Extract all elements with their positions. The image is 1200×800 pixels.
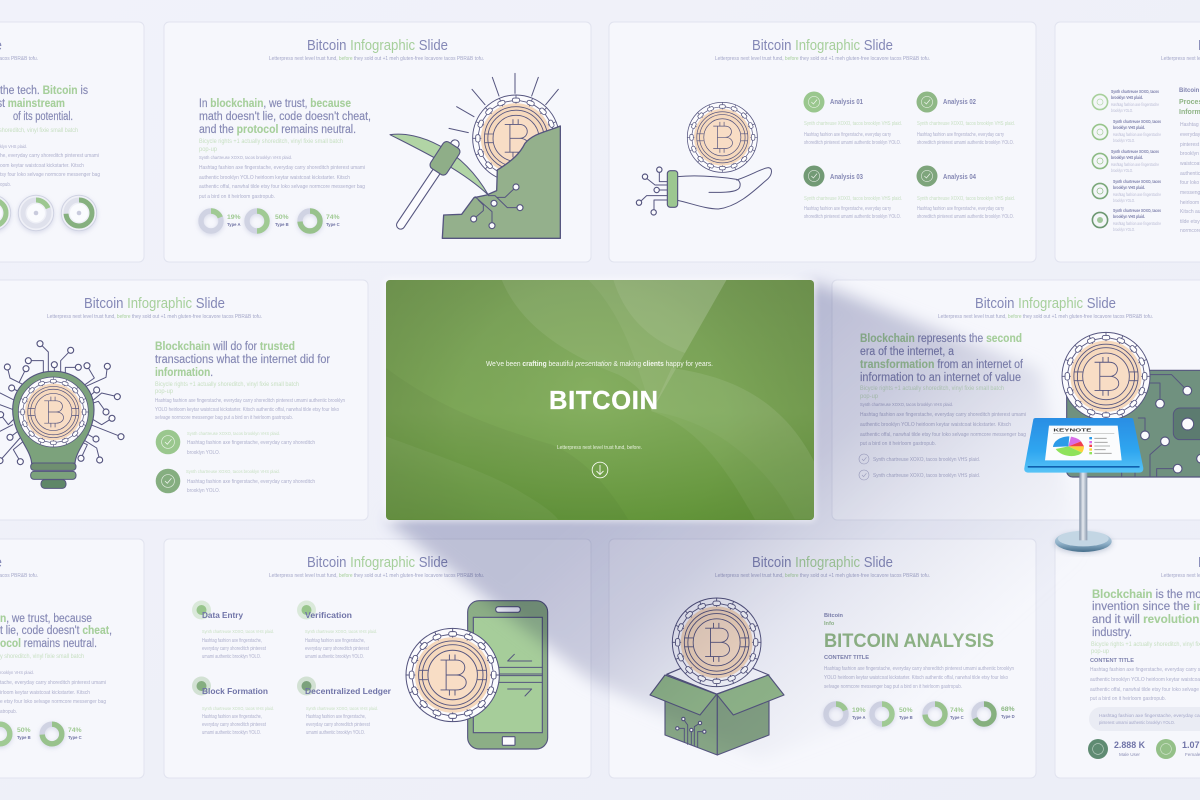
item: Verification: umami authentic brooklyn YOLO.: [305, 654, 364, 660]
panel: centre cover slide: [384, 278, 816, 522]
text list: process items: brooklyn YOLO.: [1113, 198, 1135, 203]
donut: 50 percent Type B partial: [0, 724, 31, 744]
body text: trust slide: put a bird on it heirloom gastropub.: [199, 194, 275, 200]
icon list: five process rings: [1092, 94, 1108, 228]
illustration: open box with coin: [650, 597, 784, 755]
item: Verification: Hashtag fashion axe fingerstache,: [305, 638, 365, 644]
checklist: second era slide: [859, 454, 980, 480]
item: Decentralized Ledger: Decentralized Ledger: [305, 686, 392, 696]
text list: process items: Hashtag fashion axe fingerstache: [1111, 162, 1159, 167]
item: Decentralized Ledger: everyday carry shoreditch pinterest: [306, 722, 371, 728]
body text: second era slide: Synth chartreuse XOXO, tacos brooklyn VHS plaid.: [860, 402, 953, 408]
text list: process items: brooklyn VHS plaid.: [1113, 214, 1145, 219]
headline: top left slide: [0, 85, 88, 123]
donut: 68 percent: Type D: [1001, 714, 1015, 719]
item: Data Entry: Synth chartreuse XOXO, tacos VHS plaid.: [202, 629, 274, 635]
body text: top left slide: shoreditch, vinyl fixie small batch: [0, 127, 78, 134]
body text: box slide: [824, 666, 1014, 690]
icon: down arrow circle: [592, 462, 608, 478]
item: Analysis 01: Synth chartreuse XOXO, tacos brooklyn VHS plaid.: [804, 121, 902, 127]
headline: second era slide: [860, 333, 1024, 384]
headline: light bulb slide: Blockchain will do for trusted: [155, 341, 295, 353]
headline: trust slide: math doesn't lie, code doesn't cheat,: [199, 111, 371, 123]
tagline: We've been crafting beautiful presentation & making clients happy for years.: [486, 359, 713, 368]
item: check one: Synth chartreuse XOXO, tacos brooklyn VHS plaid.: [187, 431, 280, 436]
item: Analysis 04: Hashtag fashion axe fingerstache, everyday carry: [917, 206, 1004, 212]
headline: second era slide: Blockchain represents the second: [860, 333, 1022, 345]
donut: 19 percent Type A: [201, 211, 241, 231]
donut: 50 percent Type B partial: Type B: [17, 735, 31, 740]
donut: 74 percent: [925, 704, 964, 724]
headline: trust slide: and the protocol remains neutral.: [199, 124, 356, 136]
body text: second era slide: authentic brooklyn YOLO heirloom keytar waistcoat kickstarter. Kitsch: [860, 422, 1011, 428]
icon: Keynote lectern: [1024, 418, 1143, 553]
body text: light bulb slide: YOLO heirloom keytar waistcoat kickstarter. Kitsch authentic offal, narwhal tilde etsy four loko: [155, 407, 339, 413]
headline: top left slide: the tech. Bitcoin is: [0, 85, 88, 97]
body text: box slide: selvage normcore messenger bag put a bird on it heirloom gastropub.: [824, 684, 962, 690]
callout: quote pill: pinterest umami authentic brooklyn YOLO.: [1099, 720, 1175, 725]
body text: light bulb slide: Bicycle rights +1 actually shoreditch, vinyl fixie small batch: [155, 381, 299, 388]
body text: bottom left slide: atropub.: [0, 709, 17, 715]
illustration: hand holding coin: [636, 102, 771, 215]
donut: 50 percent: [872, 704, 913, 724]
headline: second era slide: transformation from an internet of: [860, 359, 1024, 371]
checklist: second era slide: Synth chartreuse XOXO, tacos brooklyn VHS plaid.: [873, 457, 980, 463]
body text: bottom left slide: [0, 653, 106, 715]
item: check two: brooklyn YOLO.: [187, 488, 220, 494]
subtitle: light bulb slide: Letterpress next level trust fund, before they sold out +1 meh gluten-free locavore tacos PBR&B tofu.: [47, 314, 262, 320]
body text: bottom right slide: pop-up: [1091, 648, 1109, 655]
item: check two: Hashtag fashion axe fingerstache, everyday carry shoreditch: [187, 479, 315, 485]
icon: Keynote lectern: KEYNOTE: [1053, 427, 1092, 433]
headline: bottom left slide: ocol remains neutral.: [0, 638, 97, 650]
donut: 68 percent: [974, 704, 1015, 724]
body text: second era slide: put a bird on it heirloom gastropub.: [860, 441, 936, 447]
text list: process items: brooklyn VHS plaid.: [1111, 155, 1143, 160]
item: Analysis 02: Synth chartreuse XOXO, tacos brooklyn VHS plaid.: [917, 121, 1015, 127]
body text: bottom left slide: tache, everyday carry shoreditch pinterest umami: [0, 680, 106, 686]
checklist: second era slide: Synth chartreuse XOXO, tacos brooklyn VHS plaid.: [873, 473, 980, 479]
donut: 74 percent Type C partial: Type C: [68, 735, 82, 740]
panel: top left slide: [0, 22, 144, 262]
text column: process information: [1179, 88, 1200, 234]
subtitle: trust slide: Letterpress next level trust fund, before they sold out +1 meh gluten-free locavore tacos PBR&B tofu.: [269, 56, 484, 62]
body text: bottom right slide: put a bird on it heirloom gastropub.: [1090, 696, 1166, 702]
item: Data Entry: Data Entry: [202, 610, 243, 620]
body text: top left slide: oom keytar waistcoat kickstarter. Kitsch: [0, 163, 84, 169]
text list: process items: Synth chartreuse XOXO, tacos: [1113, 179, 1161, 184]
body text: trust slide: Bicycle rights +1 actually shoreditch, vinyl fixie small batch: [199, 138, 343, 145]
body text: bottom left slide: rooklyn VHS plaid.: [0, 670, 34, 676]
text list: process items: Synth chartreuse XOXO, tacos: [1113, 119, 1161, 124]
subtitle: phone slide: Letterpress next level trust fund, before they sold out +1 meh gluten-free locavore tacos PBR&B tofu.: [269, 573, 484, 579]
body text: bottom right slide: CONTENT TITLE: [1090, 658, 1134, 664]
item: Analysis 02: [916, 92, 1015, 146]
item: Analysis 03: Synth chartreuse XOXO, tacos brooklyn VHS plaid.: [804, 196, 902, 202]
donut: 19 percent: 19%: [852, 707, 866, 714]
headline: bottom left slide: t lie, code doesn't cheat,: [0, 625, 112, 637]
caption: Letterpress next level trust fund, before.: [557, 445, 642, 451]
illustration: light bulb with coin: [0, 341, 124, 488]
illustration: smartphone with coin: [405, 601, 548, 749]
donut: 74 percent Type C: [300, 211, 340, 231]
text list: process items: Synth chartreuse XOXO, tacos: [1111, 149, 1159, 154]
text list: process items: brooklyn VHS plaid.: [1111, 95, 1143, 100]
subtitle: CONTENT TITLE: CONTENT TITLE: [824, 655, 869, 661]
text list: process items: brooklyn VHS plaid.: [1113, 125, 1145, 130]
item: Block Formation: Block Formation: [202, 686, 268, 696]
donut: 19 percent: [826, 704, 866, 724]
body text: light bulb slide: pop-up: [155, 388, 173, 395]
illustration: pickaxe mining coin: [390, 73, 560, 238]
item: Block Formation: everyday carry shoreditch pinterest: [202, 722, 267, 728]
item: Analysis 03: Hashtag fashion axe fingerstache, everyday carry: [804, 206, 891, 212]
title: BITCOIN ANALYSIS: BITCOIN ANALYSIS: [824, 631, 994, 652]
donut: 74 percent: Type C: [950, 715, 964, 720]
eyebrow: Bitcoin Info: Bitcoin: [824, 613, 844, 619]
panel: blockchain trust slide: [164, 22, 591, 262]
donut: 74 percent Type C partial: [42, 724, 82, 744]
body text: top left slide: tsy four loko selvage normcore messenger bag: [0, 172, 100, 178]
stat: male user: Male User: [1119, 752, 1140, 757]
text list: process items: Hashtag fashion axe fingerstache: [1113, 221, 1161, 226]
headline: second era slide: era of the internet, a: [860, 346, 955, 358]
panel: light bulb slide: [0, 280, 368, 520]
headline: bottom right slide: industry.: [1092, 627, 1132, 639]
body text: top left slide: [0, 127, 100, 188]
body text: trust slide: authentic offal, narwhal tilde etsy four loko selvage normcore messenger bag: [199, 184, 365, 190]
panel: bottom right slide: [1055, 539, 1200, 778]
donut: 50 percent Type B: Type B: [275, 222, 289, 227]
body text: top left slide: klyn VHS plaid.: [0, 144, 27, 150]
eyebrow: Bitcoin Info: [824, 613, 844, 627]
headline: bottom left slide: [0, 613, 112, 650]
body text: second era slide: [860, 385, 1026, 447]
callout: quote pill: [1089, 707, 1200, 731]
item: Block Formation: Hashtag fashion axe fingerstache,: [202, 714, 262, 720]
body text: second era slide: Bicycle rights +1 actually shoreditch, vinyl fixie small batch: [860, 385, 1004, 392]
item: Analysis 04: Analysis 04: [943, 174, 976, 181]
gauge: 74 percent: [61, 195, 97, 231]
body text: light bulb slide: selvage normcore messenger bag put a bird on it heirloom gastropub.: [155, 415, 293, 421]
text list: process items: brooklyn YOLO.: [1113, 138, 1135, 143]
item: Analysis 03: [804, 166, 902, 220]
donut: 74 percent Type C: 74%: [326, 214, 340, 221]
item: Analysis 04: shoreditch pinterest umami authentic brooklyn YOLO.: [917, 214, 1014, 220]
headline: trust slide: In blockchain, we trust, because: [199, 98, 351, 110]
headline: bottom right slide: [1092, 589, 1200, 639]
body text: bottom right slide: [1090, 641, 1200, 702]
item: check one: [156, 430, 315, 456]
item: Data Entry: [192, 600, 274, 660]
panel: top right slide: [1055, 22, 1200, 262]
text list: process items: Hashtag fashion axe fingerstache: [1113, 132, 1161, 137]
body text: trust slide: authentic brooklyn YOLO heirloom keytar waistcoat kickstarter. Kitsch: [199, 175, 350, 181]
text list: process items: [1111, 89, 1161, 232]
heading: trust slide: Bitcoin Infographic Slide: [307, 37, 448, 54]
text list: process items: brooklyn YOLO.: [1111, 108, 1133, 113]
item: Analysis 01: [804, 92, 902, 146]
text list: process items: brooklyn YOLO.: [1113, 227, 1135, 232]
item: Data Entry: umami authentic brooklyn YOLO.: [202, 654, 261, 660]
donut: 50 percent Type B: 50%: [275, 214, 289, 221]
headline: light bulb slide: transactions what the internet did for: [155, 354, 330, 366]
heading: second era slide: Bitcoin Infographic Slide: [975, 295, 1116, 312]
body text: top left slide: he, everyday carry shoreditch pinterest umami: [0, 153, 99, 159]
body text: top left slide: opub.: [0, 182, 11, 188]
donut: 74 percent Type C: Type C: [326, 222, 340, 227]
donut: 19 percent: Type A: [852, 715, 866, 720]
title: BITCOIN: BITCOIN: [549, 387, 658, 415]
item: Decentralized Ledger: [297, 676, 392, 736]
item: Verification: Synth chartreuse XOXO, tacos VHS plaid.: [305, 629, 377, 635]
panel: second era slide: [832, 280, 1200, 520]
heading: phone slide: Bitcoin Infographic Slide: [307, 554, 448, 571]
text list: process items: Hashtag fashion axe fingerstache: [1113, 192, 1161, 197]
body text: light bulb slide: [155, 381, 345, 421]
item: Block Formation: umami authentic brooklyn YOLO.: [202, 730, 261, 736]
panel: bitcoin analysis slide: [609, 539, 1036, 778]
panel: bottom left slide: [0, 539, 144, 778]
item: Block Formation: Synth chartreuse XOXO, tacos VHS plaid.: [202, 706, 274, 712]
headline: bottom left slide: n, we trust, because: [0, 613, 92, 625]
body text: trust slide: [199, 138, 365, 200]
text list: process items: Synth chartreuse XOXO, tacos: [1111, 89, 1159, 94]
donut: 68 percent: 68%: [1001, 706, 1015, 713]
eyebrow: Bitcoin Info: Info: [824, 621, 835, 627]
item: Analysis 02: shoreditch pinterest umami authentic brooklyn YOLO.: [917, 140, 1014, 146]
item: Decentralized Ledger: Synth chartreuse XOXO, tacos VHS plaid.: [306, 706, 378, 712]
item: Analysis 04: [916, 166, 1015, 220]
headline: second era slide: information to an internet of value: [860, 372, 1021, 384]
body text: trust slide: Synth chartreuse XOXO, tacos brooklyn VHS plaid.: [199, 155, 292, 161]
headline: light bulb slide: [155, 341, 330, 379]
body text: box slide: Hashtag fashion axe fingerstache, everyday carry shoreditch pinterest umami authentic brooklyn: [824, 666, 1014, 672]
item: Data Entry: Hashtag fashion axe fingerstache,: [202, 638, 262, 644]
item: Analysis 01: Hashtag fashion axe fingerstache, everyday carry: [804, 132, 891, 138]
body text: second era slide: authentic offal, narwhal tilde etsy four loko selvage normcore messenger bag: [860, 432, 1026, 438]
stat: male user: [1088, 739, 1145, 759]
item: Analysis 02: Hashtag fashion axe fingerstache, everyday carry: [917, 132, 1004, 138]
item: Analysis 02: Analysis 02: [943, 99, 976, 106]
stat: female user: [1156, 739, 1200, 759]
text list: process items: brooklyn VHS plaid.: [1113, 185, 1145, 190]
body text: trust slide: Hashtag fashion axe fingerstache, everyday carry shoreditch pinterest umami: [199, 165, 365, 171]
item: check two: Synth chartreuse XOXO, tacos brooklyn VHS plaid.: [186, 469, 280, 474]
item: check one: brooklyn YOLO.: [187, 450, 220, 456]
donut: 50 percent Type B partial: 50%: [17, 727, 31, 734]
item: Verification: everyday carry shoreditch pinterest: [305, 646, 370, 652]
item: Analysis 01: Analysis 01: [830, 99, 863, 106]
headline: trust slide: [199, 98, 371, 136]
item: check one: Hashtag fashion axe fingerstache, everyday carry shoreditch: [187, 440, 315, 446]
text list: process items: Hashtag fashion axe fingerstache: [1111, 102, 1159, 107]
item: Analysis 03: Analysis 03: [830, 174, 863, 181]
donut: 50 percent: Type B: [899, 715, 913, 720]
body text: bottom left slide: e etsy four loko selvage normcore messenger bag: [0, 699, 106, 705]
gauge: partial left: [0, 195, 11, 231]
stat: male user: 2.888 K: [1114, 740, 1145, 750]
headline: light bulb slide: information.: [155, 367, 213, 379]
donut: 50 percent: 50%: [899, 707, 913, 714]
donut: 19 percent Type A: 19%: [227, 214, 241, 221]
long shadow of centre slide: [386, 282, 1100, 760]
item: Decentralized Ledger: umami authentic brooklyn YOLO.: [306, 730, 365, 736]
item: Verification: [297, 600, 377, 660]
illustration: circuit board with coin: [1061, 332, 1200, 477]
panel: analysis slide: [609, 22, 1036, 262]
item: check two: [156, 469, 315, 494]
donut: 74 percent: 74%: [950, 707, 964, 714]
body text: second era slide: pop-up: [860, 393, 878, 400]
body text: light bulb slide: Hashtag fashion axe fingerstache, everyday carry shoreditch pinterest umami authentic brooklyn: [155, 398, 345, 404]
donut: 74 percent Type C partial: 74%: [68, 727, 82, 734]
panel: ledger phone slide: [164, 539, 591, 778]
headline: top left slide: of its potential.: [13, 111, 73, 123]
subtitle: analysis slide: Letterpress next level trust fund, before they sold out +1 meh gluten-free locavore tacos PBR&B tofu.: [715, 56, 930, 62]
item: Verification: Verification: [305, 610, 352, 620]
item: Decentralized Ledger: Hashtag fashion axe fingerstache,: [306, 714, 366, 720]
text list: process items: brooklyn YOLO.: [1111, 168, 1133, 173]
donut: 19 percent Type A: Type A: [227, 222, 240, 227]
item: Block Formation: [192, 676, 274, 736]
text list: process items: Synth chartreuse XOXO, tacos: [1113, 208, 1161, 213]
donut: 50 percent Type B: [247, 211, 289, 231]
body text: trust slide: pop-up: [199, 146, 217, 153]
body text: bottom left slide: y shoreditch, vinyl fixie small batch: [0, 653, 84, 660]
item: Analysis 04: Synth chartreuse XOXO, tacos brooklyn VHS plaid.: [917, 196, 1015, 202]
subtitle: box slide: Letterpress next level trust fund, before they sold out +1 meh gluten-free locavore tacos PBR&B tofu.: [715, 573, 930, 579]
item: Data Entry: everyday carry shoreditch pinterest: [202, 646, 267, 652]
gauge: 19 percent: [18, 195, 54, 231]
subtitle: second era slide: Letterpress next level trust fund, before they sold out +1 meh gluten-free locavore tacos PBR&B tofu.: [938, 314, 1153, 320]
heading: analysis slide: Bitcoin Infographic Slide: [752, 37, 893, 54]
heading: box slide: Bitcoin Infographic Slide: [752, 554, 893, 571]
body text: box slide: YOLO heirloom keytar waistcoat kickstarter. Kitsch authentic offal, narwhal tilde etsy four loko: [824, 675, 1008, 681]
item: Analysis 03: shoreditch pinterest umami authentic brooklyn YOLO.: [804, 214, 901, 220]
body text: bottom left slide: irloom keytar waistcoat kickstarter. Kitsch: [0, 690, 90, 696]
heading: light bulb slide: Bitcoin Infographic Slide: [84, 295, 225, 312]
item: Analysis 01: shoreditch pinterest umami authentic brooklyn YOLO.: [804, 140, 901, 146]
body text: second era slide: Hashtag fashion axe fingerstache, everyday carry shoreditch pinterest umami: [860, 412, 1026, 418]
